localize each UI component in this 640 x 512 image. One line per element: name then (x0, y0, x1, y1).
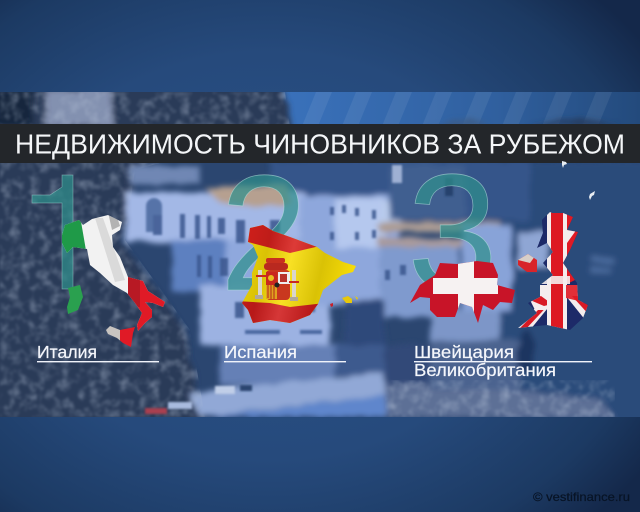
coat of arms (255, 258, 299, 301)
Sardinia (67, 285, 83, 314)
blurred scenery (0, 85, 640, 425)
Great Britain (518, 212, 588, 330)
foliage texture (0, 92, 290, 417)
Ireland (518, 254, 537, 272)
Balearic islands (342, 296, 352, 303)
label: Italy: Италия (37, 342, 97, 362)
label: Italy (37, 342, 159, 362)
mainland (242, 225, 356, 323)
label: Spain: Испания (224, 342, 297, 362)
title bar (0, 124, 640, 163)
Shetland and Orkney islets (562, 161, 595, 200)
buildings (126, 192, 306, 242)
watermark: © vestifinance.ru (533, 490, 630, 504)
photo band: coastal town (0, 85, 640, 425)
title: НЕДВИЖИМОСТЬ ЧИНОВНИКОВ ЗА РУБЕЖОМ (15, 128, 625, 160)
map flag: Italy (62, 215, 165, 347)
window details (146, 165, 453, 334)
rank numeral 3: 3 (407, 140, 498, 324)
map flag: Spain (242, 225, 358, 323)
label: Switzerland and Great Britain: Швейцария (414, 342, 514, 362)
rank numeral 1 (32, 175, 73, 289)
Sicily (106, 326, 135, 347)
label: Switzerland and Great Britain (414, 342, 592, 380)
label: Switzerland and Great Britain: Великобритания (414, 360, 556, 380)
mainland (62, 215, 165, 331)
white cross (433, 262, 498, 312)
road and cars (145, 385, 252, 414)
map flag: Switzerland (410, 261, 515, 323)
map flag: United Kingdom (515, 161, 595, 335)
sky with diagonal stripes (275, 92, 640, 126)
rank numeral 2: 2 (220, 141, 308, 325)
label: Spain (224, 342, 346, 362)
